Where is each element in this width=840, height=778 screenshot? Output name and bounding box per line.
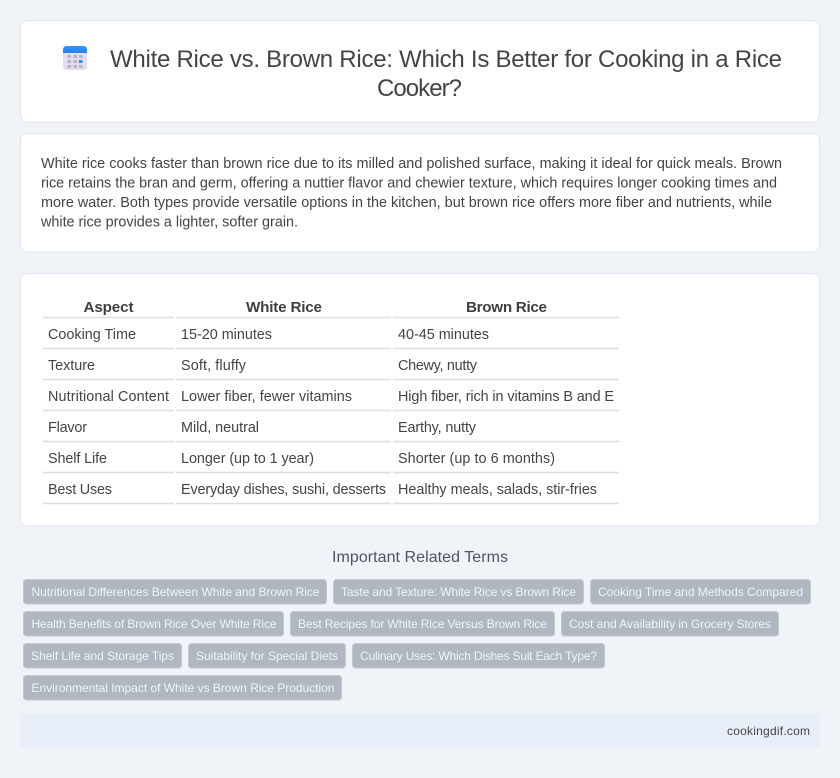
tag: cooking time and methods: Cooking Time and Methods Compared: [598, 585, 803, 599]
row: shelf life: Longer (up to 1 year): [181, 451, 314, 467]
row: nutritional content: [48, 389, 614, 405]
tag: cost and availability: Cost and Availability in Grocery Stores: [569, 617, 771, 631]
title: White Rice vs. Brown Rice: Which Is Better for Cooking in a Rice: [110, 46, 782, 73]
row: nutritional content: Nutritional Content: [48, 389, 169, 405]
tag: culinary uses: [352, 644, 604, 668]
title: [110, 46, 782, 102]
row: best uses: [48, 482, 597, 498]
tag: environmental impact: Environmental Impact of White vs Brown Rice Production: [32, 681, 334, 695]
tag: shelf life: Shelf Life and Storage Tips: [31, 649, 174, 663]
tag: cost and availability: [562, 612, 778, 636]
table header row: Brown Rice: [466, 299, 547, 316]
tag: health benefits: [24, 612, 284, 636]
tag: taste and texture: Taste and Texture: White Rice vs Brown Rice: [341, 585, 576, 599]
footer: [20, 714, 820, 748]
tag: shelf life: [24, 644, 182, 668]
tag: special diets: Suitability for Special Diets: [196, 649, 338, 663]
summary paragraph: [40, 156, 782, 230]
tag: best recipes: Best Recipes for White Rice Versus Brown Rice: [298, 617, 547, 631]
tag: special diets: [188, 644, 346, 668]
tag: nutritional differences: Nutritional Differences Between White and Brown Rice: [32, 585, 320, 599]
icon: calendar: [63, 46, 87, 70]
related term tags: [24, 580, 810, 700]
row: flavor: Flavor: [48, 420, 87, 436]
row: flavor: Mild, neutral: [181, 420, 259, 436]
row: cooking time: Cooking Time: [48, 327, 136, 343]
row: cooking time: [48, 327, 489, 343]
table grid lines: [43, 318, 619, 504]
row: nutritional content: Lower fiber, fewer vitamins: [181, 389, 352, 405]
tag: taste and texture: [334, 580, 584, 604]
tag: environmental impact: [24, 676, 342, 700]
table header row: Aspect: [84, 299, 134, 316]
tag: cooking time and methods: [590, 580, 810, 604]
tag: nutritional differences: [24, 580, 326, 604]
row: texture: Soft, fluffy: [181, 358, 247, 374]
row: texture: Chewy, nutty: [398, 358, 478, 374]
tag: best recipes: [290, 612, 554, 636]
row: nutritional content: High fiber, rich in vitamins B and E: [398, 389, 614, 405]
summary paragraph: rice retains the bran and germ, offering a nuttier flavor and chewier texture, which requires longer cooking times and: [41, 176, 777, 192]
title: Cooker?: [377, 75, 462, 102]
summary paragraph: White rice cooks faster than brown rice due to its milled and polished surface, making it ideal for quick meals. Brown: [41, 156, 782, 172]
row: flavor: Earthy, nutty: [398, 420, 477, 436]
footer source: cookingdif.com: [727, 724, 810, 738]
panel: title header: [20, 20, 820, 122]
row: texture: [48, 358, 478, 374]
row: shelf life: Shelf Life: [48, 451, 107, 467]
heading: related terms: Important Related Terms: [332, 549, 508, 566]
row: texture: Texture: [48, 358, 95, 374]
row: best uses: Healthy meals, salads, stir-fries: [398, 482, 597, 498]
row: shelf life: [48, 451, 555, 467]
tag: culinary uses: Culinary Uses: Which Dishes Suit Each Type?: [360, 649, 597, 663]
summary paragraph: more water. Both types provide versatile options in the kitchen, but brown rice offers more fiber and nutrients, while: [41, 195, 772, 211]
table header row: White Rice: [246, 299, 322, 316]
panel: comparison table: [20, 274, 820, 526]
table header row: [84, 299, 547, 316]
row: shelf life: Shorter (up to 6 months): [398, 451, 555, 467]
row: flavor: [48, 420, 477, 436]
panel: summary text: [20, 134, 820, 252]
tag: health benefits: Health Benefits of Brown Rice Over White Rice: [32, 617, 277, 631]
row: cooking time: 40-45 minutes: [398, 327, 489, 343]
summary paragraph: white rice provides a lighter, softer grain.: [40, 214, 298, 230]
row: best uses: Best Uses: [48, 482, 112, 498]
row: best uses: Everyday dishes, sushi, desserts: [181, 482, 386, 498]
row: cooking time: 15-20 minutes: [181, 327, 272, 343]
